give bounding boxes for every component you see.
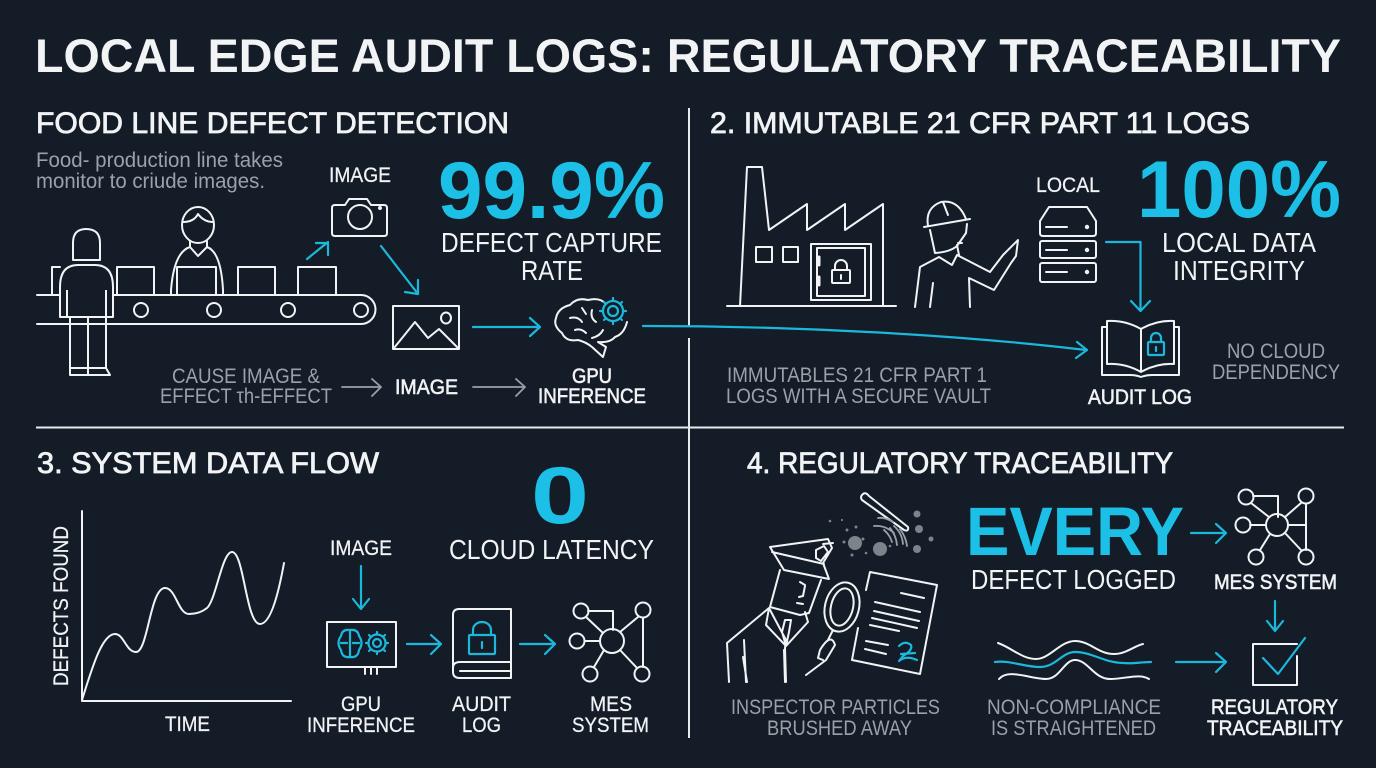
icon: audit log book with lock: [1102, 321, 1179, 377]
caption: cause image and effect: CAUSE IMAGE &: [172, 365, 320, 388]
stat label: defect capture rate: DEFECT CAPTURE: [441, 227, 662, 258]
caption: inspector particles: BRUSHED AWAY: [767, 717, 912, 740]
label: audit log: AUDIT LOG: [1088, 386, 1192, 409]
label: gpu inference: GPU: [572, 365, 612, 388]
icon: operator standing: [60, 229, 113, 375]
stat label: defect capture rate: RATE: [521, 255, 583, 286]
label: gpu inference: [538, 365, 646, 408]
label: gpu inference: GPU: [341, 693, 381, 716]
panel: food line defect detection: [36, 107, 665, 408]
label: image: IMAGE: [330, 537, 392, 560]
arrow: image to brain: [473, 318, 540, 336]
note: no cloud dependency: DEPENDENCY: [1212, 361, 1340, 384]
stat label: local data integrity: LOCAL DATA: [1162, 227, 1316, 258]
caption: immutable logs vault: IMMUTABLES 21 CFR PART 1: [727, 364, 987, 387]
stat: 99.9%: 99.9%: [438, 146, 665, 236]
label: regulatory traceability: [1207, 696, 1343, 740]
icon: image frame: [393, 306, 459, 349]
arrow: conveyor to camera: [307, 242, 328, 259]
note: no cloud dependency: NO CLOUD: [1227, 340, 1325, 363]
stat label: defect capture rate: [441, 227, 662, 286]
note: no cloud dependency: [1212, 340, 1340, 384]
description text: monitor to criude images.: [36, 170, 265, 193]
arrow: cause to image: [342, 379, 381, 396]
arrow: audit log to mes: [520, 635, 555, 654]
arrow: image to gpu: [353, 566, 369, 609]
label: gpu inference: [307, 693, 415, 737]
arrow: waves to checkbox: [1176, 653, 1226, 672]
caption: inspector particles: INSPECTOR PARTICLES: [731, 696, 940, 719]
heading: panel 3: 3. SYSTEM DATA FLOW: [37, 447, 380, 480]
icon: brush and particles: [829, 493, 934, 556]
arrow: gpu inference to audit log: [643, 326, 1087, 358]
caption: non-compliance: NON-COMPLIANCE: [987, 696, 1161, 719]
icon: mes network: [1236, 488, 1314, 564]
panel: system data flow: [37, 447, 654, 737]
line chart: defects over time: [50, 511, 291, 736]
caption: non-compliance: [987, 696, 1161, 740]
icon: conveyor belt with boxes: [37, 267, 376, 324]
label: image: IMAGE: [395, 376, 458, 399]
line chart: defects over time: TIME: [165, 713, 210, 736]
heading: panel 2: 2. IMMUTABLE 21 CFR PART 11 LOGS: [710, 107, 1250, 140]
icon: inspector with magnifier: [727, 539, 865, 682]
stat: zero: 0: [531, 451, 589, 541]
icon: mes network: [570, 602, 650, 682]
icon: engineer with hard hat: [915, 202, 1018, 307]
label: regulatory traceability: TRACEABILITY: [1207, 717, 1343, 740]
arrow: image to gpu: [473, 379, 525, 396]
caption: immutable logs vault: [726, 364, 991, 408]
stat label: local data integrity: [1162, 227, 1316, 286]
label: audit log: LOG: [462, 714, 501, 737]
heading: panel 1: FOOD LINE DEFECT DETECTION: [36, 107, 509, 140]
icon: gpu card: [327, 622, 396, 674]
label: audit log: AUDIT: [452, 693, 511, 716]
icon: compliance document: [852, 572, 937, 674]
icon: camera: [332, 199, 387, 236]
icon: wavy lines straightened: [995, 641, 1151, 679]
label: image above camera: IMAGE: [329, 164, 391, 187]
label: mes system: MES: [590, 693, 632, 716]
icon: factory with vault: [727, 167, 896, 306]
arrow: gpu to audit log: [407, 635, 441, 654]
icon: worker at line: [171, 207, 223, 294]
stat: 100%: 100%: [1137, 145, 1341, 235]
label: mes system: [572, 693, 649, 737]
panel: immutable logs: [710, 107, 1341, 409]
label: gpu inference: INFERENCE: [307, 714, 415, 737]
description text: [36, 149, 283, 193]
stat label: cloud latency: CLOUD LATENCY: [449, 534, 654, 565]
line chart: defects over time: DEFECTS FOUND: [50, 526, 73, 686]
label: mes system: MES SYSTEM: [1214, 571, 1337, 594]
panel: regulatory traceability: [727, 447, 1343, 740]
arrow: mes to traceability: [1267, 601, 1283, 631]
arrow: every to mes: [1191, 524, 1226, 543]
title: LOCAL EDGE AUDIT LOGS: REGULATORY TRACEABILITY: [35, 29, 1341, 82]
label: regulatory traceability: REGULATORY: [1211, 696, 1338, 719]
icon: locked audit log book: [453, 609, 511, 678]
caption: cause image and effect: [160, 365, 332, 408]
stat label: defect logged: DEFECT LOGGED: [971, 564, 1176, 595]
caption: non-compliance: IS STRAIGHTENED: [991, 717, 1156, 740]
arrow: server to audit log: [1106, 242, 1150, 311]
caption: immutable logs vault: LOGS WITH A SECURE VAULT: [726, 385, 991, 408]
label: gpu inference: INFERENCE: [538, 385, 646, 408]
arrow: camera to image: [381, 246, 418, 294]
label: local: LOCAL: [1036, 174, 1100, 197]
icon: checkbox: [1253, 638, 1305, 685]
heading: panel 4: 4. REGULATORY TRACEABILITY: [747, 447, 1173, 480]
label: audit log: [452, 693, 511, 737]
stat label: local data integrity: INTEGRITY: [1173, 255, 1305, 286]
caption: inspector particles: [731, 696, 940, 740]
label: mes system: SYSTEM: [572, 714, 649, 737]
stat: every: EVERY: [966, 493, 1184, 570]
icon: local server stack: [1040, 207, 1096, 282]
icon: brain with gear: [555, 298, 627, 357]
caption: cause image and effect: EFFECT τh-EFFECT: [160, 385, 332, 408]
description text: Food- production line takes: [36, 149, 283, 172]
